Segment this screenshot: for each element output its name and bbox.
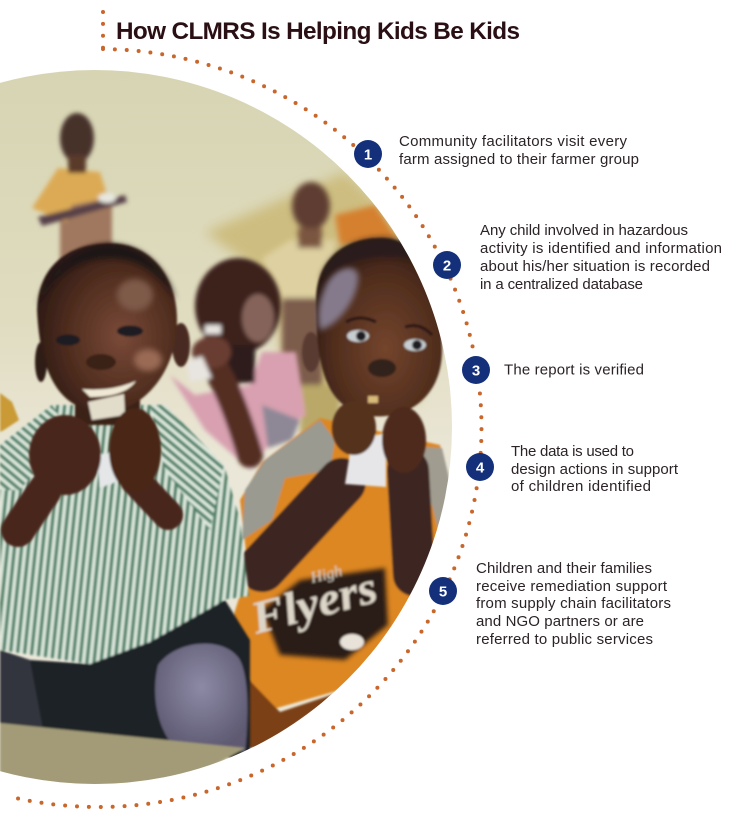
step 5 text: from supply chain facilitators (476, 595, 671, 612)
badge 1: 1 (364, 146, 372, 164)
packet and hands (88, 394, 125, 420)
shirt print (262, 568, 388, 660)
step 5 text: referred to public services (476, 631, 653, 648)
step 2 text: about his/her situation is recorded (480, 258, 710, 275)
step 2 text: activity is identified and information (480, 240, 722, 257)
badge 3: 3 (472, 362, 480, 380)
step 5 (429, 560, 671, 648)
right child shirt and torso: High (308, 563, 344, 587)
badge 2: 2 (443, 258, 451, 274)
badge 4: 4 (476, 460, 485, 476)
step 5 text (476, 560, 671, 648)
background child standing (32, 113, 127, 265)
left child head (18, 243, 190, 530)
badge 2 (433, 251, 461, 279)
step 1 text (399, 133, 639, 168)
step 4 text (511, 443, 679, 495)
bench (0, 723, 245, 790)
badge 3 (462, 356, 490, 384)
step 3 (462, 356, 644, 384)
step 4 text: The data is used to (511, 443, 634, 460)
step 2 text (480, 222, 722, 293)
badge 5: 5 (439, 584, 447, 600)
middle child (170, 258, 306, 470)
step 5 text: and NGO partners or are (476, 613, 644, 630)
step 4 (466, 443, 679, 495)
badge 4 (466, 453, 494, 481)
left yellow shoulder (0, 393, 19, 432)
hands and packet (345, 433, 386, 487)
dotted timeline arc (7, 12, 481, 807)
step 1 text: Community facilitators visit every (399, 133, 628, 150)
photo: smiling children in a circle (0, 60, 470, 800)
badge 5 (429, 577, 457, 605)
step 3 text: The report is verified (504, 362, 644, 378)
step 4 text: of children identified (511, 478, 651, 495)
step 2 text: in a centralized database (480, 276, 643, 293)
knee (155, 644, 247, 752)
background children on right (262, 182, 398, 435)
title: How CLMRS Is Helping Kids Be Kids (116, 18, 520, 45)
right child head (302, 238, 442, 487)
right child shirt and torso: Flyers (244, 561, 382, 644)
step 1 (354, 133, 639, 168)
background shadow on wall (205, 172, 420, 400)
step 2 (433, 222, 722, 293)
right child shirt and torso (230, 418, 452, 748)
step 4 text: design actions in support (511, 461, 679, 478)
left child shirt and lower body (0, 405, 250, 790)
badge 1 (354, 140, 382, 168)
step 5 text: receive remediation support (476, 578, 668, 595)
shorts (28, 599, 252, 758)
step 1 text: farm assigned to their farmer group (399, 151, 639, 168)
classroom wall (0, 60, 470, 800)
step 5 text: Children and their families (476, 560, 652, 577)
arms (262, 482, 342, 568)
step 2 text: Any child involved in hazardous (480, 222, 688, 239)
